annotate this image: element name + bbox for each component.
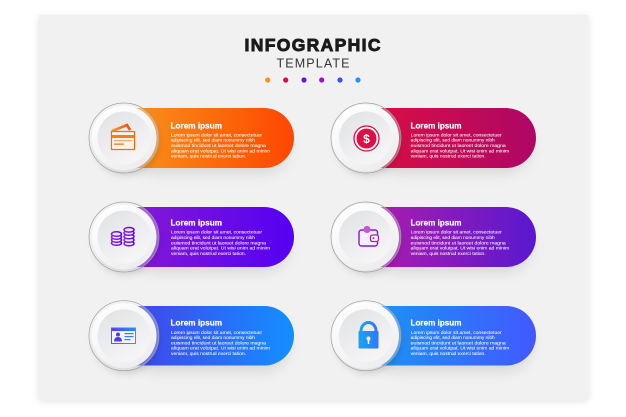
panel: card 6 sky blue: [331, 301, 536, 373]
colour dots: [265, 77, 361, 83]
pill: [342, 306, 536, 366]
text: card 6: euismod tincidunt ut laoreet dolore magna: [411, 340, 506, 346]
text: card 2: Lorem ipsum: [410, 120, 462, 130]
text: card 1: [170, 120, 270, 160]
text: card 1: veniam, quis nostrud exerci tation.: [171, 154, 246, 160]
text: card 2: veniam, quis nostrud exerci tation.: [411, 154, 486, 160]
text: card 6: Lorem ipsum: [410, 317, 462, 327]
text: card 2: aliquam erat volutpat. Ut wisi enim ad minim: [411, 148, 509, 154]
pill: [100, 306, 294, 366]
panel: card 3 violet: [89, 202, 294, 274]
text: card 3: Lorem ipsum dolor sit amet, consectetuer: [171, 230, 262, 236]
icon: wallet: [359, 226, 378, 246]
text: card 1: Lorem ipsum dolor sit amet, consectetuer: [171, 132, 262, 138]
text: card 4: euismod tincidunt ut laoreet dolore magna: [411, 240, 506, 246]
text: card 4: adipiscing elit, sed diam nonummy nibh: [411, 235, 495, 241]
text: card 1: aliquam erat volutpat. Ut wisi enim ad minim: [171, 148, 270, 154]
circle badge: [89, 202, 159, 274]
icon: dollar coin: [354, 126, 379, 151]
pill: [342, 207, 536, 267]
text: card 2: [410, 120, 509, 160]
text: card 6: Lorem ipsum dolor sit amet, consectetuer: [411, 330, 502, 336]
text: card 4: [410, 217, 509, 257]
text: card 2: Lorem ipsum dolor sit amet, consectetuer: [411, 132, 502, 138]
subtitle: TEMPLATE: [276, 56, 350, 70]
text: card 3: Lorem ipsum: [170, 217, 222, 227]
text: card 3: euismod tincidunt ut laoreet dolore magna: [171, 240, 266, 246]
text: card 4: Lorem ipsum: [410, 217, 462, 227]
panel: card 5 blue: [89, 301, 294, 373]
text: card 6: aliquam erat volutpat. Ut wisi enim ad minim: [411, 346, 509, 352]
text: card 5: Lorem ipsum: [170, 317, 222, 327]
panel: card 4 magenta: [331, 202, 536, 274]
icon: dollar coin: $: [363, 132, 370, 146]
text: card 6: adipiscing elit, sed diam nonummy nibh: [411, 335, 495, 341]
title: INFOGRAPHIC: [244, 35, 381, 55]
text: card 1: Lorem ipsum: [170, 120, 222, 130]
text: card 5: veniam, quis nostrud exerci tation.: [171, 351, 246, 357]
icon: credit cards: [112, 125, 134, 150]
title: [244, 35, 381, 70]
pill: [342, 108, 536, 168]
icon: padlock: [358, 322, 378, 348]
circle badge: [89, 301, 159, 373]
circle badge: [89, 103, 159, 175]
icon: id card: [112, 328, 136, 344]
circle badge: [331, 103, 401, 175]
text: card 5: [170, 317, 270, 357]
text: card 4: veniam, quis nostrud exerci tation.: [411, 251, 486, 257]
text: card 4: Lorem ipsum dolor sit amet, consectetuer: [411, 230, 502, 236]
text: card 1: adipiscing elit, sed diam nonummy nibh: [171, 138, 255, 144]
panel: card 1 orange: [89, 103, 294, 175]
text: card 3: [170, 217, 270, 257]
circle badge: [331, 301, 401, 373]
panel: card 2 crimson: [331, 103, 536, 175]
text: card 5: adipiscing elit, sed diam nonummy nibh: [171, 335, 255, 341]
text: card 1: euismod tincidunt ut laoreet dolore magna: [171, 143, 266, 149]
text: card 3: adipiscing elit, sed diam nonummy nibh: [171, 235, 255, 241]
text: card 5: euismod tincidunt ut laoreet dolore magna: [171, 340, 266, 346]
pill: [100, 108, 294, 168]
text: card 2: adipiscing elit, sed diam nonummy nibh: [411, 138, 495, 144]
text: card 3: veniam, quis nostrud exerci tation.: [171, 251, 246, 257]
icon: coin stacks: [112, 228, 134, 246]
text: card 5: Lorem ipsum dolor sit amet, consectetuer: [171, 330, 262, 336]
circle badge: [331, 202, 401, 274]
text: card 4: aliquam erat volutpat. Ut wisi enim ad minim: [411, 246, 509, 252]
pill: [100, 207, 294, 267]
text: card 2: euismod tincidunt ut laoreet dolore magna: [411, 143, 506, 149]
text: card 6: veniam, quis nostrud exerci tation.: [411, 351, 486, 357]
text: card 5: aliquam erat volutpat. Ut wisi enim ad minim: [171, 346, 270, 352]
text: card 3: aliquam erat volutpat. Ut wisi enim ad minim: [171, 246, 270, 252]
text: card 6: [410, 317, 509, 357]
